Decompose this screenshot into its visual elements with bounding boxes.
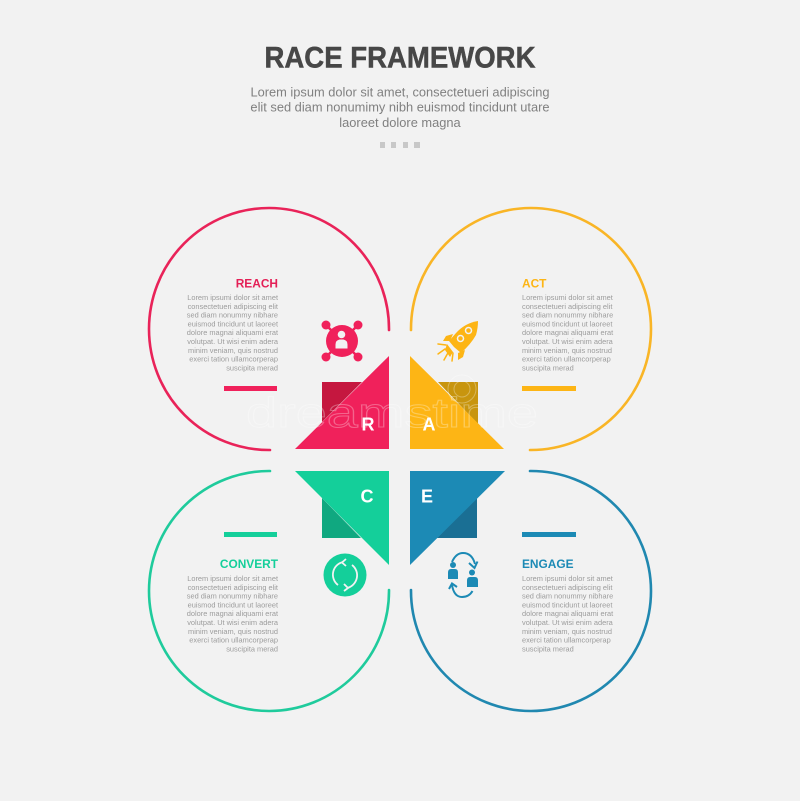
reach body text: consectetueri adipiscing elit — [188, 302, 278, 311]
engage body text: volutpat. Ut wisi enim adera — [522, 618, 614, 627]
engage body text: suscipita merad — [522, 644, 574, 653]
convert body text: suscipita merad — [226, 644, 278, 653]
engage body text: Lorem ipsumi dolor sit amet — [522, 574, 613, 583]
convert divider bar — [224, 532, 277, 537]
act body text: consectetueri adipiscing elit — [522, 302, 612, 311]
convert body text: volutpat. Ut wisi enim adera — [187, 618, 279, 627]
engage heading: ENGAGE — [522, 557, 574, 571]
watermark: dreamstime — [246, 389, 538, 436]
subtitle text block — [250, 84, 550, 130]
triangle: E: E — [421, 486, 433, 506]
act divider bar — [522, 386, 576, 391]
triangle: A — [410, 356, 504, 449]
convert body text: euismod tincidunt ut laoreet — [188, 600, 278, 609]
panel: convert — [149, 471, 389, 711]
reach body text: sed diam nonummy nibhare — [187, 311, 278, 320]
triangle: A: A — [422, 414, 436, 434]
engage body text: euismod tincidunt ut laoreet — [522, 600, 612, 609]
convert body text: consectetueri adipiscing elit — [188, 583, 278, 592]
engage divider bar — [522, 532, 576, 537]
convert circle outline — [149, 471, 389, 711]
act body text: exerci tation ullamcorperap — [522, 355, 611, 364]
convert body text: Lorem ipsumi dolor sit amet — [187, 574, 278, 583]
engage body text: consectetueri adipiscing elit — [522, 583, 612, 592]
act body text: sed diam nonummy nibhare — [522, 311, 613, 320]
convert body text: minim veniam, quis nostrud — [188, 627, 278, 636]
panel: engage — [411, 471, 651, 711]
convert body text — [187, 574, 279, 653]
reach heading: REACH — [236, 276, 278, 290]
act body text: dolore magnai aliquami erat — [522, 328, 613, 337]
convert heading: CONVERT — [220, 557, 279, 571]
title: RACE FRAMEWORK — [264, 42, 536, 74]
engage circle outline — [411, 471, 651, 711]
icon: engage people cycle — [448, 553, 478, 597]
reach body text: exerci tation ullamcorperap — [189, 355, 278, 364]
reach body text — [187, 293, 279, 372]
reach circle outline — [149, 208, 389, 450]
triangle: R — [295, 356, 389, 449]
act body text — [522, 293, 614, 372]
icon: convert refresh — [324, 554, 366, 596]
triangle: R: R — [362, 414, 374, 434]
act heading: ACT — [522, 276, 547, 290]
triangle: E — [410, 471, 505, 565]
pagination dots — [380, 142, 420, 148]
triangle: C — [295, 471, 389, 565]
reach divider bar — [224, 386, 277, 391]
watermark — [246, 375, 538, 436]
engage body text: exerci tation ullamcorperap — [522, 636, 611, 645]
reach body text: minim veniam, quis nostrud — [188, 346, 278, 355]
engage body text: minim veniam, quis nostrud — [522, 627, 612, 636]
reach body text: volutpat. Ut wisi enim adera — [187, 337, 279, 346]
engage body text — [522, 574, 614, 653]
subtitle text block: laoreet dolore magna — [339, 115, 462, 130]
engage body text: sed diam nonummy nibhare — [522, 592, 613, 601]
triangle: C: C — [360, 486, 374, 506]
reach body text: dolore magnai aliquami erat — [187, 328, 278, 337]
reach body text: Lorem ipsumi dolor sit amet — [187, 293, 278, 302]
icon: act rocket — [438, 321, 478, 361]
subtitle text block: elit sed diam nonumimy nibh euismod tincidunt utare — [250, 100, 550, 114]
convert body text: dolore magnai aliquami erat — [187, 609, 278, 618]
subtitle text block: Lorem ipsum dolor sit amet, consectetueri adipiscing — [250, 84, 550, 100]
engage body text: dolore magnai aliquami erat — [522, 609, 613, 618]
convert body text: sed diam nonummy nibhare — [187, 592, 278, 601]
icon: reach target person — [322, 320, 362, 362]
act body text: euismod tincidunt ut laoreet — [522, 319, 612, 328]
convert body text: exerci tation ullamcorperap — [189, 636, 278, 645]
reach body text: suscipita merad — [226, 363, 278, 372]
panel: reach — [149, 208, 389, 450]
panel: act — [411, 208, 651, 450]
act body text: suscipita merad — [522, 363, 574, 372]
reach body text: euismod tincidunt ut laoreet — [188, 319, 278, 328]
act body text: volutpat. Ut wisi enim adera — [522, 337, 614, 346]
act circle outline — [411, 208, 651, 450]
act body text: minim veniam, quis nostrud — [522, 346, 612, 355]
act body text: Lorem ipsumi dolor sit amet — [522, 293, 613, 302]
